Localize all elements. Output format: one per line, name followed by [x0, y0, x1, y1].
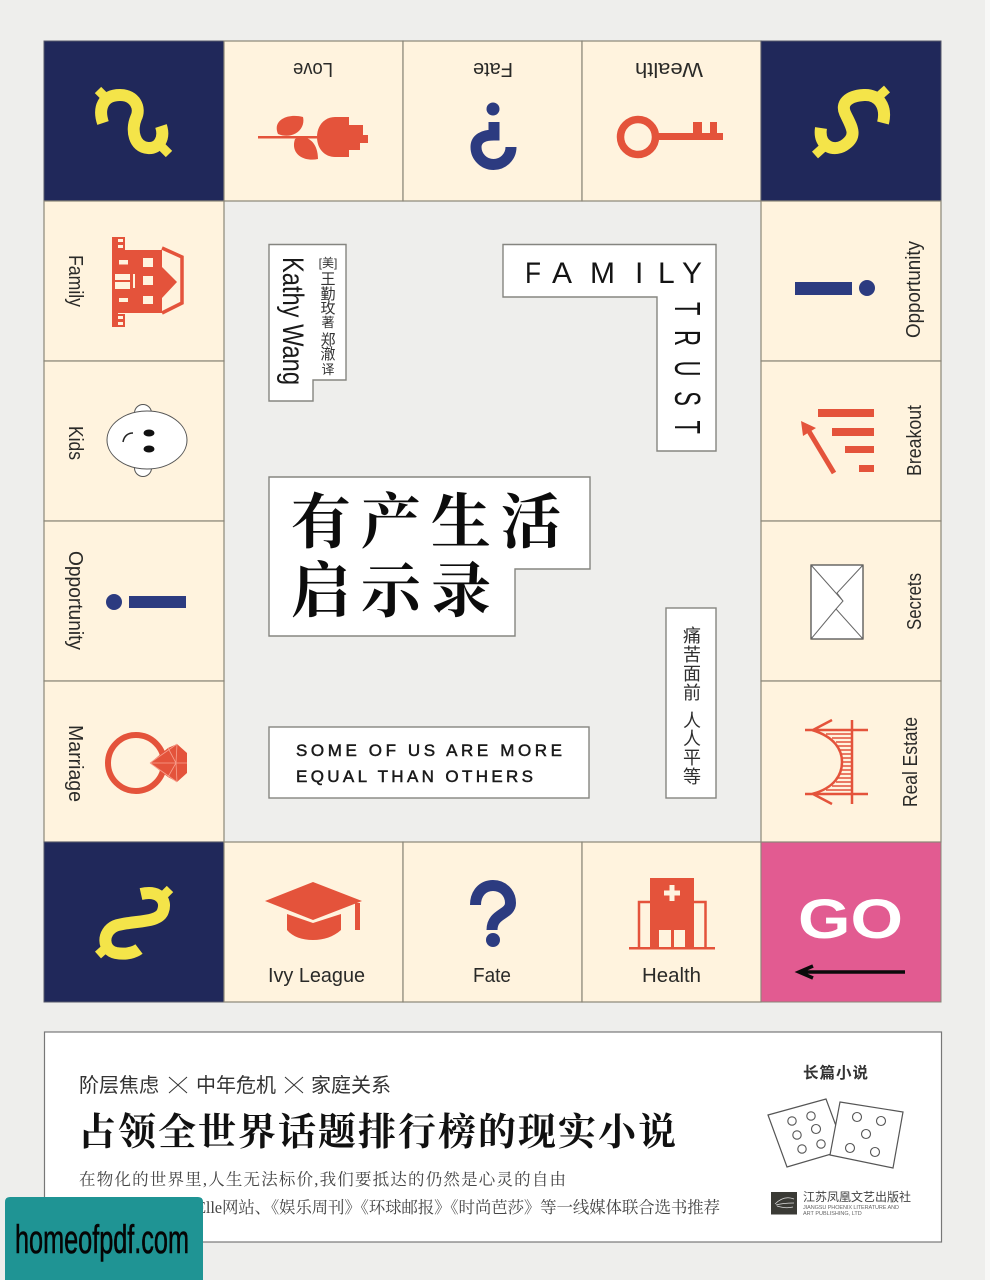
vertical tagline: 痛 — [683, 626, 701, 646]
chinese title — [269, 477, 590, 636]
vertical tagline: 面 — [683, 664, 701, 684]
space: family: Family — [64, 255, 86, 307]
space: opportunity right — [761, 201, 941, 361]
author label: 著 — [321, 315, 335, 330]
space: ivy league — [224, 842, 403, 1002]
space: breakout: Breakout — [904, 405, 926, 476]
space: wealth: Wealth — [635, 58, 703, 80]
publisher logo: JIANGSU PHOENIX LITERATURE AND — [803, 1205, 899, 1211]
publisher logo — [771, 1189, 911, 1217]
english title: F — [525, 257, 541, 290]
media recommendations: Elle网站、《娱乐周刊》《环球邮报》《时尚芭莎》等一线媒体联合选书推荐 — [196, 1198, 720, 1217]
space: opportunity left — [44, 521, 224, 681]
keywords line: 家庭关系 — [311, 1074, 391, 1097]
author label — [269, 244, 346, 401]
space: real estate — [761, 681, 941, 842]
vertical tagline: 平 — [683, 748, 701, 768]
english title: A — [552, 257, 572, 290]
watermark — [5, 1197, 203, 1280]
english title: I — [635, 257, 643, 290]
author label: 王 — [320, 271, 336, 288]
space: kids — [44, 361, 224, 521]
space: go: GO — [798, 887, 903, 950]
author label: 澈 — [320, 346, 336, 363]
english subtitle: EQUAL THAN OTHERS — [296, 767, 533, 786]
vertical tagline: 苦 — [683, 645, 701, 665]
space: health — [582, 842, 761, 1002]
space: real estate: Real Estate — [900, 717, 922, 807]
corner: top-left dollar — [44, 41, 224, 201]
vertical tagline: 人 — [683, 729, 701, 749]
publisher logo: ART PUBLISHING, LTD — [803, 1211, 862, 1217]
tagline: 在物化的世界里,人生无法标价,我们要抵达的仍然是心灵的自由 — [79, 1170, 566, 1189]
author label: [美] — [319, 256, 337, 270]
space: fate bottom: Fate — [473, 965, 511, 987]
space: fate top — [403, 41, 582, 201]
vertical tagline: 前 — [683, 683, 701, 703]
space: opportunity right: Opportunity — [903, 241, 925, 338]
chinese title: 启示录 — [291, 559, 501, 625]
english title: Y — [682, 257, 702, 290]
keywords line: 阶层焦虑 — [79, 1074, 159, 1097]
keywords line — [79, 1074, 391, 1097]
space: family — [44, 201, 224, 361]
game board — [44, 41, 941, 1002]
english title: TRUST — [667, 302, 706, 434]
author label: Kathy Wang — [277, 257, 310, 385]
english title: M — [590, 257, 615, 290]
space: opportunity left: Opportunity — [64, 551, 86, 650]
watermark: homeofpdf.com — [15, 1218, 189, 1262]
space: love — [224, 41, 403, 201]
space: love: Love — [293, 58, 333, 80]
english subtitle: SOME OF US ARE MORE — [296, 741, 562, 760]
icon: dice — [768, 1099, 903, 1168]
space: breakout — [761, 361, 941, 521]
author label: 郑 — [320, 332, 336, 349]
space: marriage: Marriage — [64, 725, 86, 802]
space: health: Health — [642, 965, 701, 987]
english subtitle — [269, 727, 589, 798]
space: fate bottom — [403, 842, 582, 1002]
author label: 勤 — [320, 286, 336, 303]
space: secrets: Secrets — [904, 573, 926, 630]
vertical tagline: 等 — [683, 767, 701, 787]
space: kids: Kids — [64, 426, 86, 460]
headline: 占领全世界话题排行榜的现实小说 — [78, 1112, 676, 1154]
genre label: 长篇小说 — [803, 1063, 869, 1082]
space: secrets — [761, 521, 941, 681]
english title — [503, 244, 716, 451]
bottom band — [44, 1032, 942, 1242]
space: go — [761, 842, 941, 1002]
keywords line: 中年危机 — [196, 1074, 276, 1097]
space: fate top: Fate — [473, 58, 513, 80]
english title: L — [658, 257, 675, 290]
space: ivy league: Ivy League — [268, 965, 365, 987]
chinese title: 有产生活 — [291, 490, 571, 556]
space: marriage — [44, 681, 224, 842]
vertical tagline — [666, 608, 716, 798]
corner: bottom-left dollar — [44, 842, 224, 1002]
space: wealth — [582, 41, 761, 201]
publisher logo: 江苏凤凰文艺出版社 — [803, 1189, 911, 1204]
vertical tagline: 人 — [683, 711, 701, 731]
corner: top-right dollar — [761, 41, 941, 201]
author label: 译 — [321, 362, 335, 377]
author label: 玫 — [320, 300, 336, 317]
